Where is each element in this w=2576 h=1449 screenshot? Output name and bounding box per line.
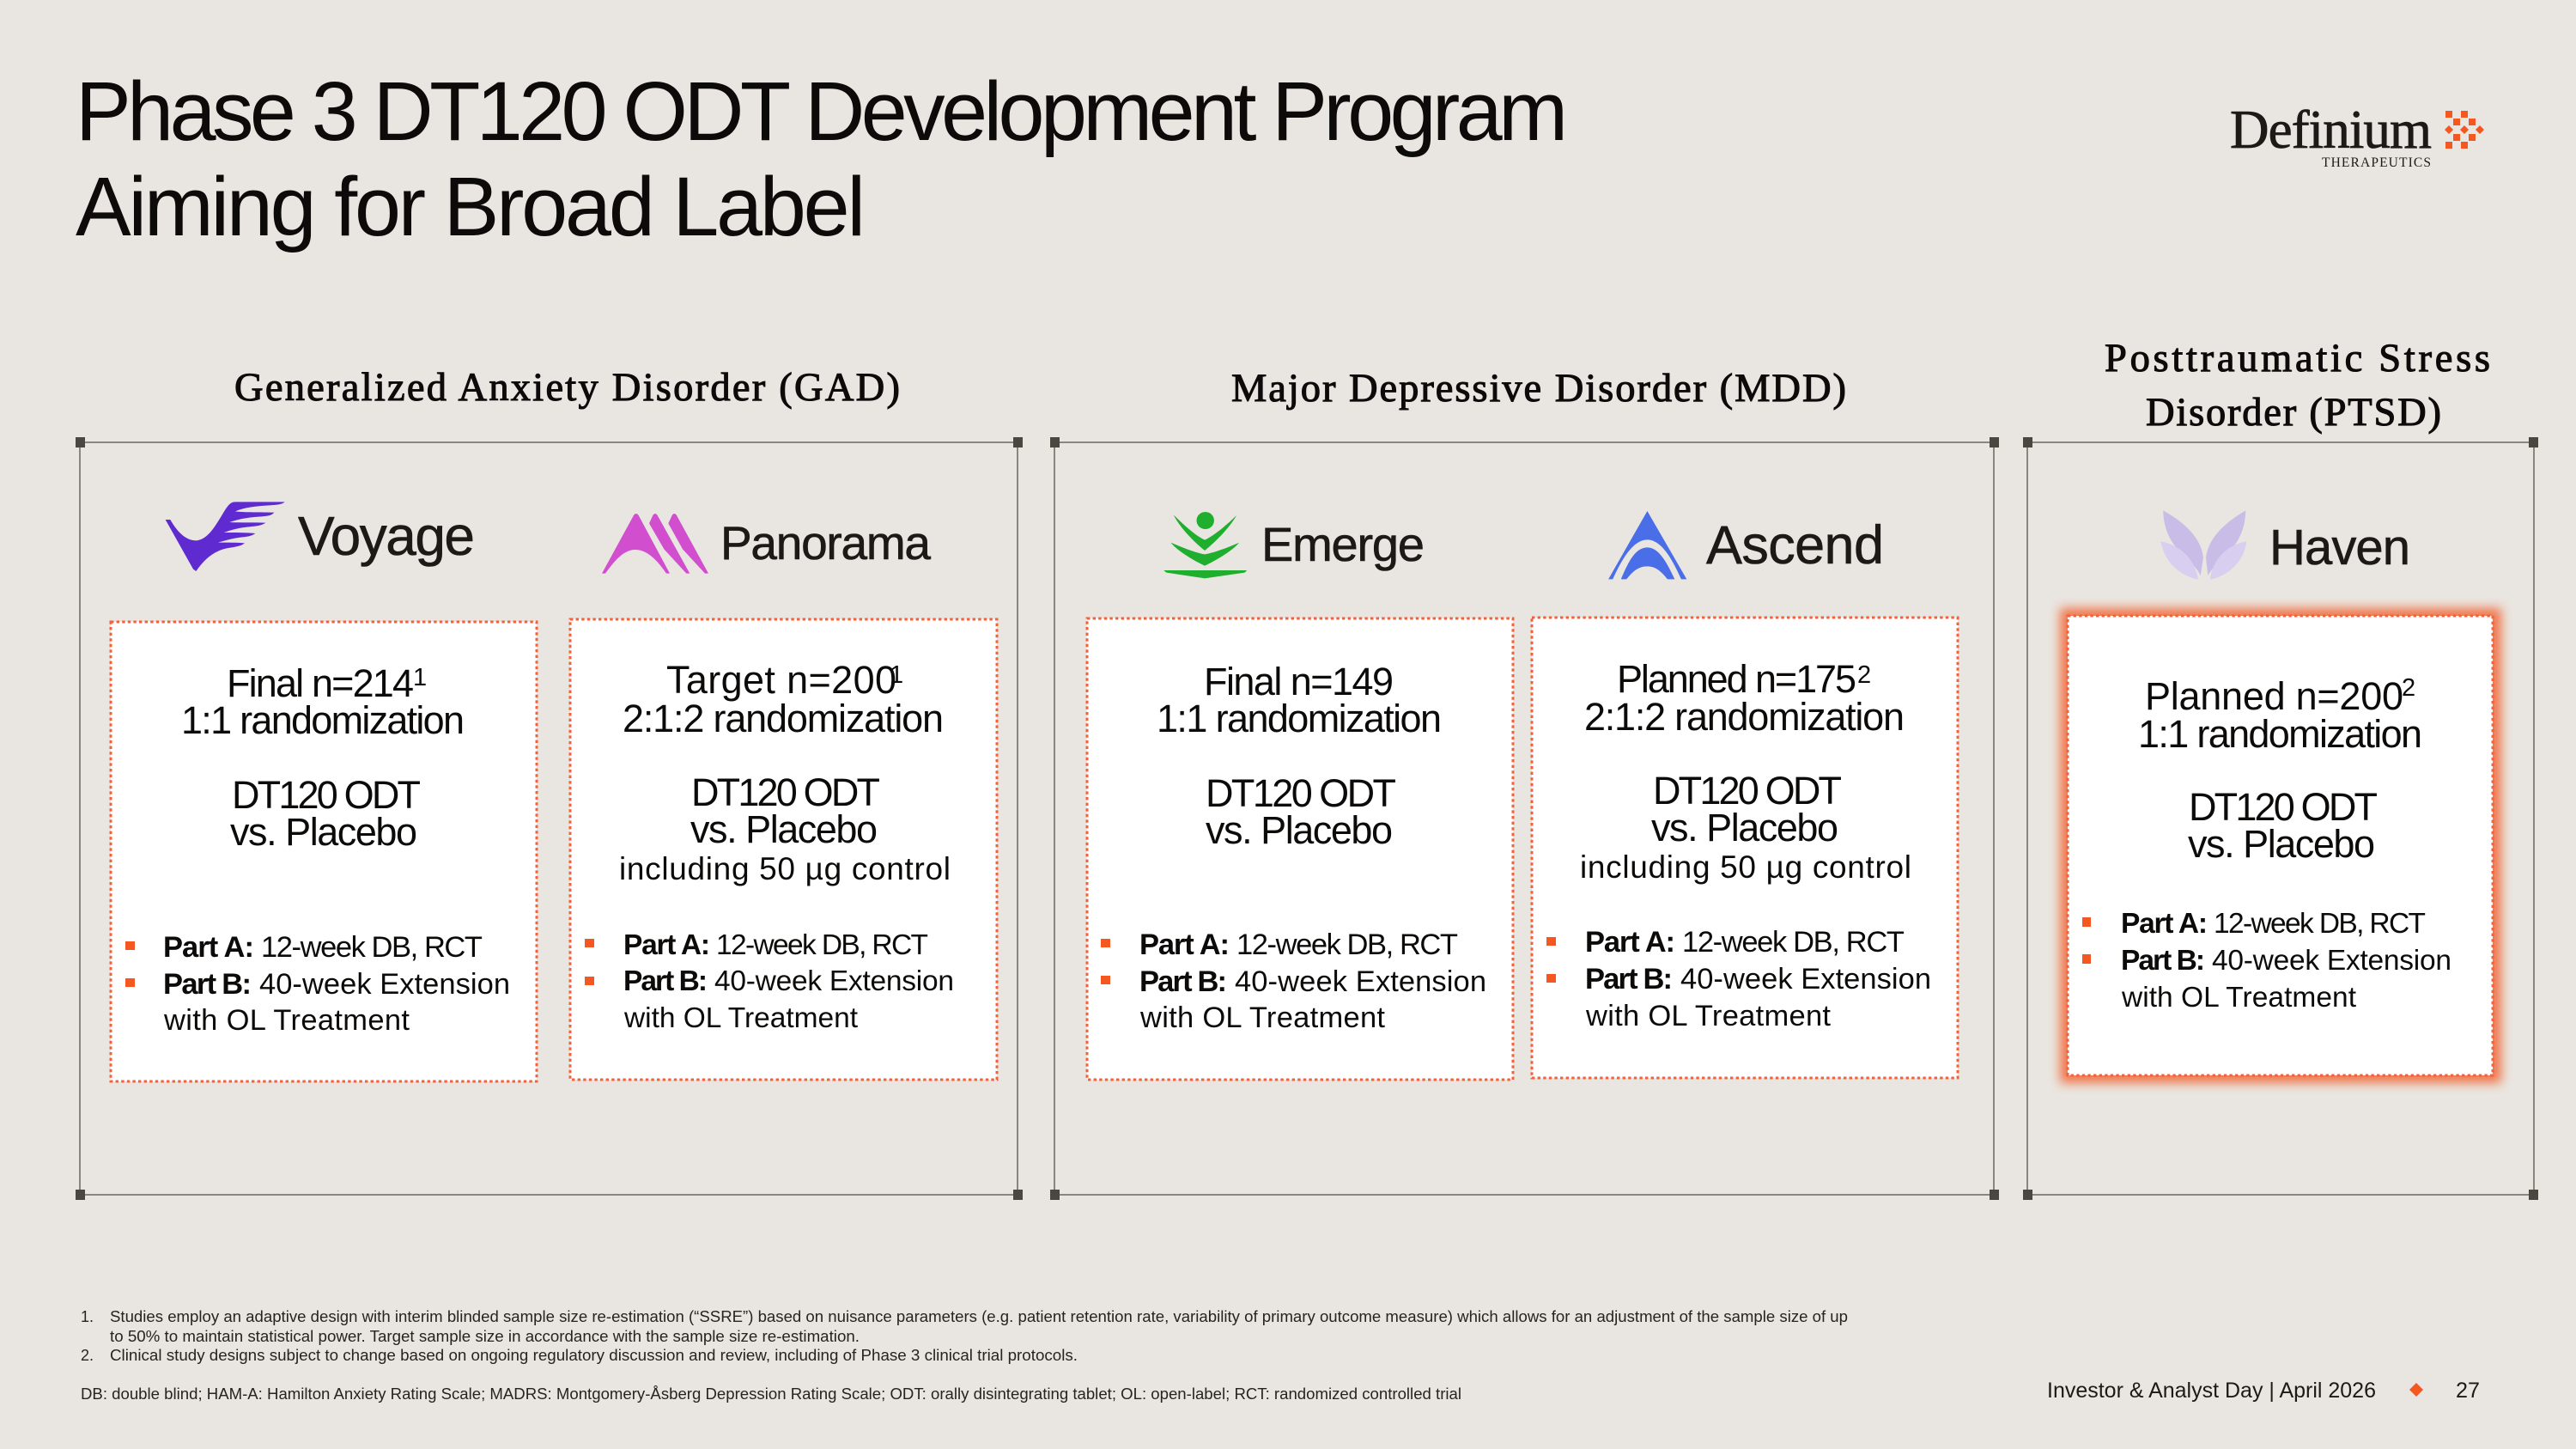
- card: Voyage: [111, 622, 537, 1081]
- card: Panorama: 40-week Extension: [714, 965, 954, 997]
- card: Voyage: vs. Placebo: [230, 810, 417, 854]
- icon: Voyage: [166, 502, 285, 571]
- card: Panorama: [570, 619, 997, 1080]
- footer: Investor & Analyst Day | April 2026: [2047, 1379, 2376, 1403]
- icon: Emerge: [1163, 512, 1247, 578]
- card: Haven (highlighted): Part A:: [2121, 908, 2208, 940]
- card: Haven (highlighted): with OL Treatment: [2121, 982, 2357, 1014]
- card: Ascend: 2:1:2 randomization: [1584, 695, 1905, 739]
- card: Ascend: Part A:: [1585, 926, 1675, 959]
- footnotes: [81, 1308, 1848, 1403]
- icon: Haven: [2160, 510, 2246, 580]
- label: Ascend: Ascend: [1706, 515, 1884, 575]
- panel: PTSD frame: [2023, 437, 2538, 1200]
- card: Panorama: 2:1:2 randomization: [623, 697, 944, 740]
- card: Voyage: Part A:: [163, 931, 254, 964]
- card: Emerge: with OL Treatment: [1139, 1002, 1385, 1034]
- card: Haven (highlighted): 2: [2402, 674, 2415, 702]
- card: Ascend: vs. Placebo: [1651, 806, 1838, 849]
- card: Haven (highlighted): vs. Placebo: [2188, 822, 2375, 866]
- icon: Panorama: [602, 514, 708, 574]
- card: Emerge: 1:1 randomization: [1157, 697, 1442, 740]
- card: Haven (highlighted): Part B:: [2121, 945, 2205, 977]
- card: Emerge: Part A:: [1139, 928, 1230, 961]
- card: Panorama: Target n=200: [666, 658, 896, 702]
- card: Ascend: Part B:: [1585, 963, 1673, 995]
- logo: Definium Therapeutics: [2230, 100, 2484, 170]
- card: Ascend: Planned n=175: [1617, 657, 1856, 701]
- footer: 27: [2456, 1379, 2480, 1403]
- card: Ascend: 12-week DB, RCT: [1682, 926, 1905, 959]
- footnotes: 1.: [81, 1308, 94, 1325]
- card: Voyage: 40-week Extension: [259, 968, 510, 1001]
- card: Haven (highlighted): 12-week DB, RCT: [2214, 908, 2426, 940]
- card: Emerge: 12-week DB, RCT: [1236, 928, 1458, 961]
- card: Haven (highlighted): DT120 ODT: [2189, 785, 2378, 829]
- card: Voyage: Final n=214: [227, 661, 414, 705]
- card: Emerge: vs. Placebo: [1206, 808, 1393, 852]
- card: Ascend: 2: [1857, 661, 1871, 689]
- card: Haven (highlighted): 1:1 randomization: [2138, 712, 2422, 756]
- heading: MDD: Major Depressive Disorder (MDD): [1231, 367, 1846, 411]
- card: Haven (highlighted): 40-week Extension: [2212, 945, 2451, 977]
- footnotes: Studies employ an adaptive design with interim blinded sample size re-estimation (“SSRE”) based on nuisance parameters (e.g. patient retention rate, variability of primary outcome measure) which allows for an adjustment of the sample size of up: [110, 1308, 1848, 1325]
- card: Panorama: with OL Treatment: [623, 1002, 859, 1034]
- card: Voyage: 1: [413, 664, 427, 691]
- card: Voyage: with OL Treatment: [163, 1004, 410, 1037]
- card: Emerge: 40-week Extension: [1235, 965, 1486, 998]
- icon: Ascend: [1608, 511, 1686, 579]
- card: Voyage: 1:1 randomization: [181, 698, 465, 742]
- card: Ascend: 40-week Extension: [1680, 963, 1931, 995]
- heading: PTSD: [2105, 337, 2490, 435]
- card: Panorama: DT120 ODT: [691, 770, 880, 814]
- card: Panorama: Part B:: [623, 965, 708, 997]
- logo: Definium Therapeutics: Definium: [2230, 100, 2432, 160]
- label: Panorama: Panorama: [720, 516, 931, 569]
- card: Voyage: 12-week DB, RCT: [261, 931, 483, 964]
- card: Haven (highlighted): [2060, 608, 2501, 1083]
- label: Voyage: Voyage: [298, 505, 475, 567]
- label: Haven: Haven: [2269, 520, 2410, 575]
- card: Ascend: [1532, 618, 1958, 1078]
- card: Emerge: DT120 ODT: [1206, 771, 1396, 815]
- heading: PTSD: Disorder (PTSD): [2146, 391, 2441, 435]
- footnotes: to 50% to maintain statistical power. Target sample size in accordance with the sample size re-estimation.: [110, 1328, 860, 1345]
- card: Emerge: [1087, 618, 1513, 1080]
- card: Panorama: 1: [890, 661, 903, 689]
- card: Ascend: DT120 ODT: [1653, 769, 1842, 813]
- card: Ascend: with OL Treatment: [1585, 1000, 1831, 1032]
- footnotes: DB: double blind; HAM-A: Hamilton Anxiety Rating Scale; MADRS: Montgomery-Åsberg Depression Rating Scale; ODT: orally disintegrating tablet; OL: open-label; RCT: randomized controlled trial: [81, 1385, 1461, 1403]
- card: Voyage: Part B:: [163, 968, 252, 1001]
- panel: MDD frame: [1050, 437, 1999, 1200]
- footnotes: 2.: [81, 1347, 94, 1364]
- logo: Definium Therapeutics: THERAPEUTICS: [2322, 155, 2431, 170]
- card: Ascend: including 50 µg control: [1580, 849, 1911, 885]
- card: Haven (highlighted): Planned n=200: [2145, 674, 2403, 718]
- card: Emerge: Part B:: [1139, 965, 1227, 998]
- heading: GAD: Generalized Anxiety Disorder (GAD): [234, 366, 900, 410]
- card: Panorama: vs. Placebo: [690, 807, 878, 851]
- panel: GAD frame: [76, 437, 1023, 1200]
- title: Phase 3 DT120 ODT Development Program: [76, 64, 1568, 158]
- card: Voyage: DT120 ODT: [232, 773, 421, 817]
- label: Emerge: Emerge: [1261, 517, 1425, 571]
- card: Panorama: 12-week DB, RCT: [716, 929, 928, 961]
- footnotes: Clinical study designs subject to change based on ongoing regulatory discussion and review, including of Phase 3 clinical trial protocols.: [110, 1347, 1078, 1364]
- title: Aiming for Broad Label: [76, 160, 866, 253]
- title: [76, 64, 1568, 253]
- card: Panorama: including 50 µg control: [619, 851, 951, 886]
- heading: PTSD: Posttraumatic Stress: [2105, 337, 2490, 381]
- card: Emerge: Final n=149: [1204, 660, 1394, 703]
- card: Panorama: Part A:: [623, 929, 710, 961]
